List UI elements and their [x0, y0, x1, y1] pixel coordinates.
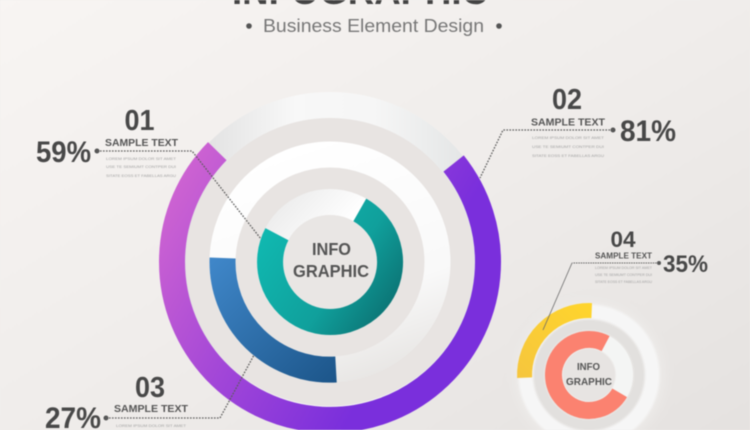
inner white ring	[554, 340, 624, 410]
callout 04: USE TE SEMIUMT CONTPER DUI	[595, 273, 652, 277]
callout 01: USE TE SEMIUMT CONTPER DUI	[106, 164, 176, 169]
callout 04: 04	[610, 227, 636, 252]
callout 02: SAMPLE TEXT	[531, 116, 606, 128]
blue arc	[223, 258, 336, 370]
callout 01: 01	[124, 105, 154, 137]
teal arc	[270, 210, 390, 322]
callout 03: LOREM IPSUM DOLOR SIT AMET	[116, 423, 187, 428]
callout 03	[45, 355, 254, 430]
small donut chart	[501, 287, 677, 430]
center label: INFO	[312, 239, 351, 259]
white ring	[526, 312, 652, 430]
callout 02: LOREM IPSUM DOLOR SIT AMET	[532, 135, 605, 140]
callout 03: 03	[135, 372, 165, 404]
callout 02: 02	[552, 84, 582, 116]
center label: GRAPHIC	[293, 261, 369, 281]
callout 01: LOREM IPSUM DOLOR SIT AMET	[106, 156, 177, 161]
subtitle: Business Element Design	[263, 16, 484, 36]
coral arc	[553, 339, 620, 410]
callout 02	[480, 84, 676, 178]
callout 03: SAMPLE TEXT	[114, 403, 189, 415]
top light ring track	[173, 105, 487, 419]
callout 02: 81%	[620, 115, 676, 148]
center disc	[283, 215, 377, 309]
callout 04: 35%	[663, 251, 708, 278]
callout 01: SITATE EOSS ET FABELLAS ARGU	[106, 173, 176, 178]
purple arc	[172, 151, 488, 420]
small center label: INFO	[577, 361, 600, 373]
callout 04	[543, 227, 708, 330]
gray base disc	[184, 116, 476, 408]
halo	[501, 287, 677, 430]
callout 01: SAMPLE TEXT	[105, 137, 179, 149]
callout 04: LOREM IPSUM DOLOR SIT AMET	[595, 266, 653, 270]
callout 04: SAMPLE TEXT	[595, 252, 652, 260]
large donut chart	[172, 105, 488, 420]
inner white ring track	[270, 202, 390, 322]
small center disc	[563, 349, 615, 401]
small center label: GRAPHIC	[566, 376, 612, 388]
gray ring	[539, 325, 639, 425]
callout 02: USE TE SEMIUMT CONTPER DUI	[532, 144, 604, 149]
center label	[293, 239, 369, 281]
callout 01: 59%	[36, 136, 91, 169]
callout 04: SITATE EOSS ET FABELLAS ARGU	[595, 280, 652, 284]
callout 02: SITATE EOSS ET FABELLAS ARGU	[532, 153, 604, 158]
white ring track	[222, 154, 438, 370]
callout 01	[36, 105, 261, 239]
yellow arc	[525, 311, 592, 378]
small center label	[566, 361, 612, 388]
